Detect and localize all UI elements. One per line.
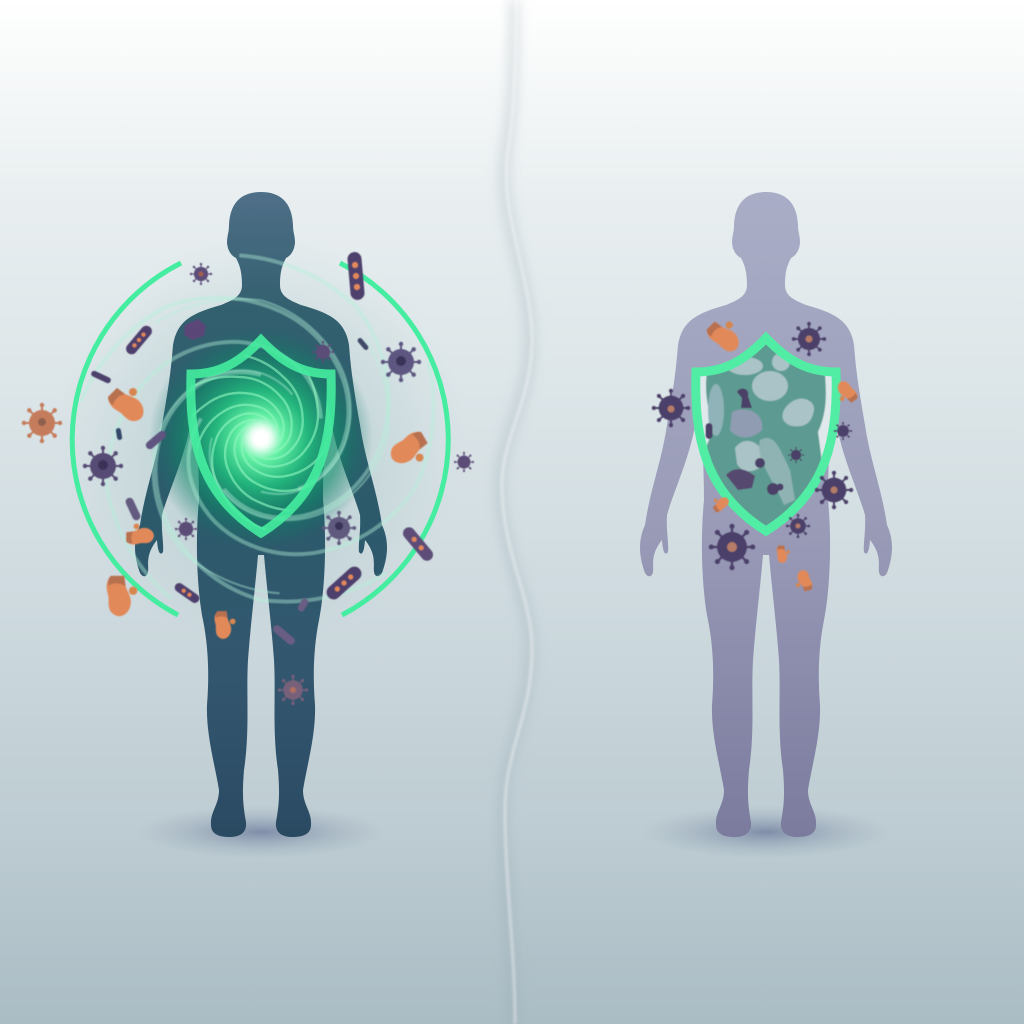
right orange pathogens <box>707 322 860 594</box>
left bacilli <box>90 251 435 646</box>
right figure: weakened body <box>640 192 892 837</box>
right shield infected interior <box>698 344 834 526</box>
left protective arcs <box>72 263 448 615</box>
left orange pathogens <box>93 388 430 642</box>
outer energy swirl <box>64 232 455 613</box>
left figure ground shadow <box>136 806 386 858</box>
left shield <box>191 340 331 533</box>
right viruses <box>652 322 853 570</box>
right shield <box>696 338 836 531</box>
inner bright vortex <box>195 356 320 530</box>
left figure: healthy body with swirl <box>79 192 436 837</box>
wavy centre divider <box>500 0 532 1024</box>
right figure ground shadow <box>641 806 891 858</box>
left viruses <box>22 263 474 705</box>
